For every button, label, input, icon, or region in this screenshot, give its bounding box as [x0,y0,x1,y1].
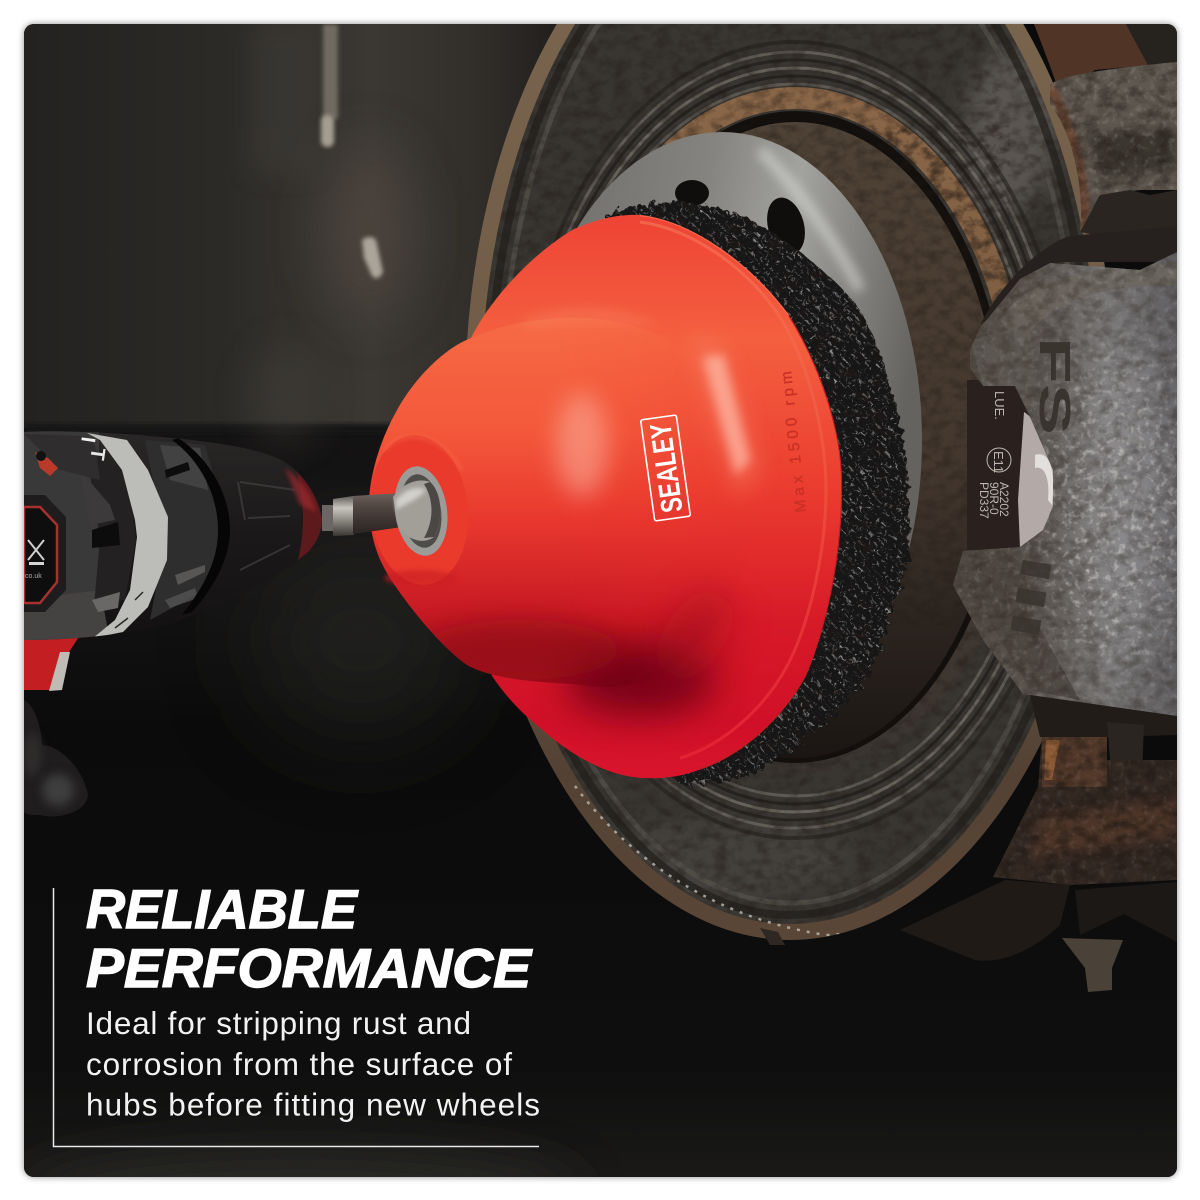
heading [86,878,533,999]
cordless drill: T [85,446,109,461]
cordless drill [24,428,324,691]
pad marking text: LUE. [992,391,1007,420]
pad marking text: 90R-0 [987,482,1001,515]
cast lettering III: III [1000,551,1061,643]
description text: corrosion from the surface of [86,1046,512,1082]
rim glint [574,785,840,936]
embossed max speed text: Max 1500 rpm [778,370,810,513]
description text [86,1005,540,1122]
brake caliper [950,245,1180,735]
flange rim highlights [640,215,843,770]
rusty inner ring [661,87,1009,304]
model lettering on drill: I [76,435,99,444]
cup flange [460,215,842,778]
cup dome [369,318,668,686]
caption bracket line [54,888,539,1146]
wheel hub [577,111,1010,763]
rust beyond disc edge [1034,24,1148,82]
caption: reliable performance [54,878,540,1146]
heading: RELIABLE [86,878,359,940]
caliper top bracket [980,55,1180,325]
dark corner behind disc [1126,24,1177,65]
battery badge: co.uk [25,573,42,580]
caliper underside and lower bracket [760,695,1180,992]
heading: PERFORMANCE [86,937,533,999]
brake pad with markings [967,380,1057,550]
dark ring [172,438,230,615]
disc rim [473,0,1107,932]
pad marking text: E11 [991,451,1006,473]
washer and nut [393,466,448,556]
red backing cup [362,215,843,778]
drill red base [24,638,78,690]
shading on cup [520,308,760,716]
battery badge [24,495,66,612]
description text: hubs before fitting new wheels [86,1086,540,1122]
cast lettering FS: FS [1030,337,1079,435]
drill base silver tab [49,652,70,691]
gloved hand [23,700,88,816]
description text: Ideal for stripping rust and [86,1005,471,1041]
pad marking text: PD337 [977,482,991,519]
silver hub face [577,132,922,583]
abrasive stripping pad [590,190,920,790]
pad marking text: A2202 [997,482,1011,517]
brand logo: SEALEY [644,421,690,515]
white band [87,433,168,638]
flat drive face [370,435,466,584]
collar grip [146,440,218,620]
pad marking text [977,391,1011,519]
drill bit shaft [322,493,402,536]
brake disc [467,24,1105,940]
